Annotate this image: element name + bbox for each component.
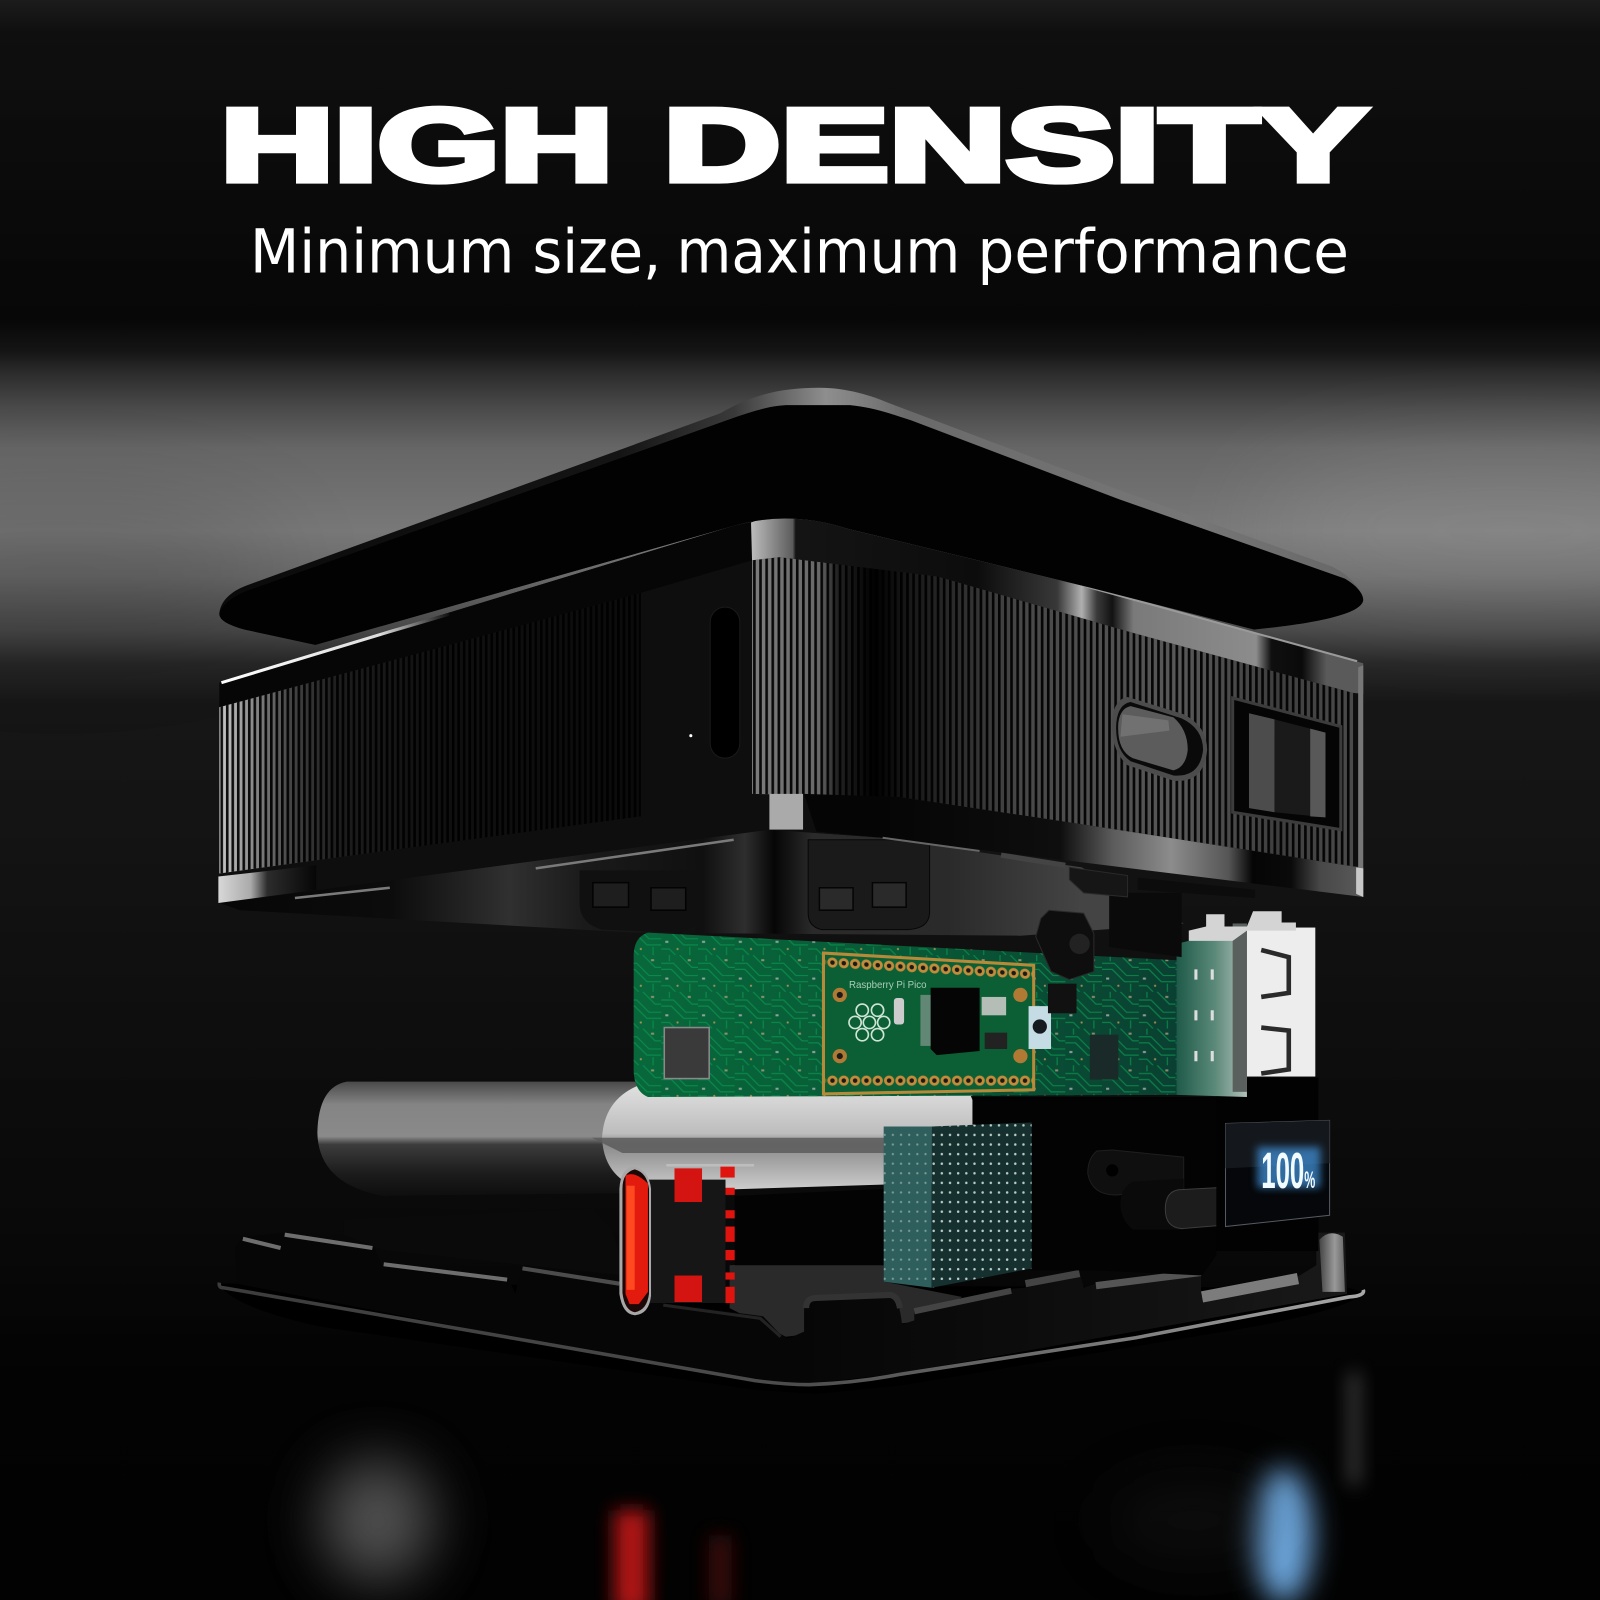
left bottom block xyxy=(218,865,316,903)
switch bar xyxy=(1088,1150,1184,1195)
switch knob xyxy=(1165,1188,1235,1229)
lid outer rim xyxy=(219,388,1363,645)
metal shell xyxy=(619,1166,651,1315)
tray corner post xyxy=(1319,1233,1345,1292)
floor reflections xyxy=(321,1372,1359,1600)
device underside with internal clips xyxy=(219,830,1184,936)
tray wall xyxy=(235,1233,1347,1384)
title: HIGH xyxy=(220,88,613,203)
teal block xyxy=(884,1122,1032,1288)
underside highlights xyxy=(295,840,734,898)
chip right xyxy=(1090,1035,1118,1080)
under lip xyxy=(219,1284,1363,1394)
rear wall xyxy=(344,1209,624,1276)
title xyxy=(220,88,1367,203)
tray tab highlights xyxy=(243,1235,507,1280)
black internal module xyxy=(972,1097,1235,1276)
lid black top xyxy=(219,405,1363,645)
left top band xyxy=(219,522,752,707)
title: DENSITY xyxy=(663,88,1367,203)
tactile button xyxy=(1036,910,1094,980)
silver bottom corner xyxy=(769,794,803,830)
tray: lower shell xyxy=(219,1209,1363,1394)
left ribs xyxy=(219,593,641,873)
left top highlight xyxy=(221,614,449,683)
metal clips above USB xyxy=(1189,911,1296,941)
battery percentage: 100% xyxy=(1261,1142,1315,1199)
large chip left xyxy=(664,1028,709,1079)
raspberry logo xyxy=(849,1004,890,1041)
subtitle: maximum xyxy=(677,217,960,287)
Raspberry Pi Pico board xyxy=(823,953,1051,1094)
right top highlight xyxy=(1087,587,1357,661)
left clip xyxy=(580,870,698,933)
battery xyxy=(317,1082,975,1196)
USB ports xyxy=(1233,698,1341,830)
bracket connector xyxy=(1069,867,1255,957)
board label: Raspberry Pi Pico xyxy=(849,980,927,991)
right clip xyxy=(808,840,930,930)
battery percentage glow xyxy=(1257,1147,1320,1188)
small indicator dot xyxy=(689,734,692,737)
red contacts xyxy=(626,1174,648,1304)
glossy top band xyxy=(751,517,1363,694)
inner floor xyxy=(730,1262,962,1337)
subtitle xyxy=(250,217,1349,287)
shell base xyxy=(219,519,1363,903)
subtitle: Minimum size, xyxy=(250,217,661,287)
display panel xyxy=(1216,1078,1330,1251)
vertical slot xyxy=(710,607,740,758)
upper shell xyxy=(218,388,1363,903)
wall behind connector xyxy=(735,1189,888,1265)
switch base xyxy=(1120,1179,1184,1230)
USB-C connector xyxy=(619,1165,888,1315)
pill switch xyxy=(1112,697,1207,781)
right end sliver xyxy=(1358,665,1363,897)
glossy bottom band xyxy=(804,794,1363,897)
circuit board xyxy=(634,933,1177,1097)
small chip under button xyxy=(1048,984,1077,1013)
lip xyxy=(219,1283,1363,1385)
microcontroller xyxy=(931,988,980,1055)
right ribs xyxy=(752,557,1353,866)
subtitle: performance xyxy=(978,217,1349,287)
white USB port xyxy=(1177,923,1315,1097)
